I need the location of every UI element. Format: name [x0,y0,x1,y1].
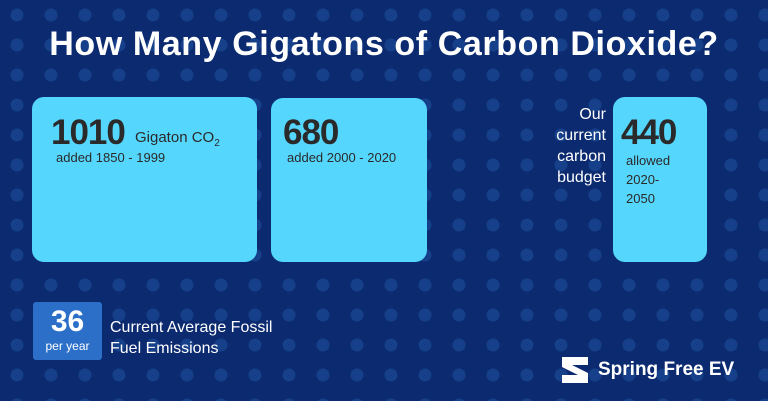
panel: 1850-1999: added 1850 - 1999 [56,150,165,165]
panel: 1850-1999 [32,97,257,262]
text: fossil fuel emissions [110,319,272,357]
badge: 36 per year [33,302,102,360]
panel: 1850-1999: Gigaton CO2 [135,129,220,149]
title: How Many Gigatons of Carbon Dioxide? [49,25,719,63]
panel: 2000-2020: added 2000 - 2020 [287,150,396,165]
panel: 2000-2020: 680 [283,113,338,152]
panel: 2020-2050: 2020- [626,172,659,187]
panel: 1850-1999: 1010 [51,113,125,152]
panel: 2020-2050: 440 [621,113,676,152]
logo: Spring Free EV: Spring Free EV [598,359,734,380]
panel: 2020-2050: allowed [626,153,670,168]
panel: 2000-2020 [271,98,427,262]
text: carbon budget label: Our current carbon budget [556,106,606,186]
panel: 2020-2050: 2050 [626,191,655,206]
text: fossil fuel emissions: Current Average Fossil [110,319,272,336]
badge: 36 per year: 36 [51,305,84,338]
text: fossil fuel emissions: Fuel Emissions [110,340,218,357]
logo: Spring Free EV [562,357,734,383]
badge: 36 per year: per year [45,339,90,353]
panel: 2020-2050 [613,97,707,262]
